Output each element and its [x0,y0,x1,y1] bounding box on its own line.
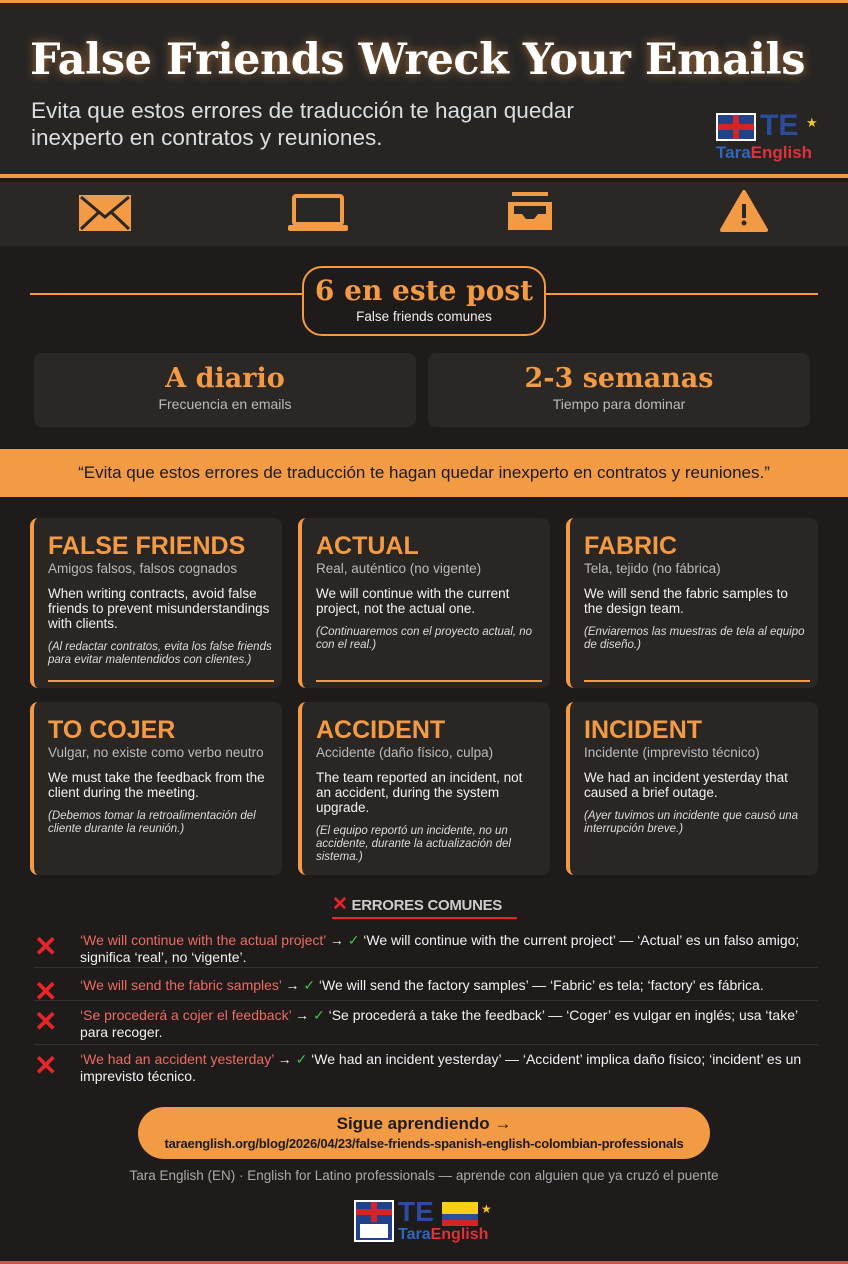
card: ACCIDENT: Accidente (daño físico, culpa) [316,745,493,760]
quote banner: “Evita que estos errores de traducción te hagan quedar inexperto en contratos y reuniones.” [78,463,770,482]
card: ACTUAL: Real, auténtico (no vigente) [316,561,481,576]
card: FALSE FRIENDS: (Al redactar contratos, evita los false friends para evitar malentendidos con clientes.) [48,641,272,666]
CTA button: Sigue aprendiendo → [337,1114,511,1133]
card: TO COJER [30,702,282,875]
card: TO COJER: We must take the feedback from the client during the meeting. [48,770,265,800]
card: FALSE FRIENDS: Amigos falsos, falsos cognados [48,561,237,576]
header [0,0,848,178]
card: ACTUAL [298,518,550,688]
icon: laptop [288,194,348,231]
logo: TaraEnglish header [716,109,818,162]
stat: 6 en este post [30,266,818,336]
card: FABRIC: We will send the fabric samples to the design team. [584,586,788,616]
error 4: ✕ [34,1050,57,1081]
card: INCIDENT: We had an incident yesterday that caused a brief outage. [584,770,788,800]
error 1: ‘We will continue with the actual project’ → ✓ ‘We will continue with the current project’ — ‘Actual’ es un falso amigo; significa ‘real’, no ‘vigente’. [80,932,799,965]
error 2 [34,977,818,1001]
logo: footer: TE [398,1196,434,1227]
card: FABRIC [566,518,818,688]
card: TO COJER: TO COJER [48,716,175,744]
card: ACCIDENT: ACCIDENT [316,716,445,744]
stat: 2-3 semanas [428,353,810,427]
CTA button [138,1107,710,1159]
logo: TaraEnglish header: TaraEnglish [716,143,812,162]
card: ACTUAL: ACTUAL [316,532,419,560]
logo: TaraEnglish header: TE [760,109,798,142]
CTA button: taraenglish.org/blog/2026/04/23/false-friends-spanish-english-colombian-professionals [164,1136,684,1151]
card: ACCIDENT [298,702,550,875]
icon bar [0,182,848,246]
card: FALSE FRIENDS: FALSE FRIENDS [48,532,245,560]
stat: 2-3 semanas: Tiempo para dominar [553,396,685,412]
card: INCIDENT [566,702,818,875]
card: FALSE FRIENDS: When writing contracts, avoid false friends to prevent misunderstandings with clients. [48,586,269,631]
card: FABRIC: (Enviaremos las muestras de tela al equipo de diseño.) [584,626,805,651]
footer text: Tara English (EN) · English for Latino professionals — aprende con alguien que ya cruzó el puente [129,1168,719,1183]
error 1: ✕ [34,931,57,962]
subtitle: inexperto en contratos y reuniones. [31,125,382,150]
title: False Friends Wreck Your Emails [30,35,805,85]
logo: TaraEnglish header: ★ [806,115,818,130]
stat: 6 en este post: 6 en este post [315,274,533,307]
subtitle: Evita que estos errores de traducción te hagan quedar [31,98,574,123]
card: TO COJER: (Debemos tomar la retroalimentación del cliente durante la reunión.) [48,810,256,835]
error 2: ‘We will send the fabric samples’ → ✓ ‘We will send the factory samples’ — ‘Fabric’ es tela; ‘factory’ es fábrica. [80,977,764,993]
logo: footer [354,1196,492,1243]
stat: 6 en este post: False friends comunes [356,309,492,324]
error 3: ✕ [34,1006,57,1037]
card: INCIDENT: (Ayer tuvimos un incidente que causó una interrupción breve.) [584,810,798,835]
quote banner [0,449,848,497]
card: ACTUAL: (Continuaremos con el proyecto actual, no con el real.) [316,626,532,651]
subtitle [31,98,574,150]
card: FALSE FRIENDS [30,518,282,688]
error 4: ‘We had an accident yesterday’ → ✓ ‘We had an incident yesterday’ — ‘Accident’ implica daño físico; ‘incident’ es un imprevisto técnico. [80,1051,801,1084]
logo: footer: TaraEnglish [398,1226,488,1243]
bottom line [0,1261,848,1264]
card: ACTUAL: We will continue with the current project, not the actual one. [316,586,509,616]
stat: A diario [34,353,416,427]
stat: 2-3 semanas: 2-3 semanas [525,363,713,394]
error 3: ‘Se procederá a cojer el feedback’ → ✓ ‘Se procederá a take the feedback’ — ‘Coger’ es vulgar en inglés; usa ‘take’ para recoger. [80,1007,798,1040]
card: ACCIDENT: The team reported an incident, not an accident, during the system upgrade. [316,770,522,815]
logo: footer: ★ [481,1202,492,1216]
icon: warning [720,190,768,232]
stat: A diario: A diario [165,363,285,394]
stat: A diario: Frecuencia en emails [158,396,292,412]
card: INCIDENT: Incidente (imprevisto técnico) [584,745,760,760]
card: ACCIDENT: (El equipo reportó un incidente, no un accidente, durante la actualización del sistema.) [316,825,511,863]
icon: envelope [79,195,131,231]
icon: inbox [508,192,552,230]
card: INCIDENT: INCIDENT [584,716,702,744]
card: TO COJER: Vulgar, no existe como verbo neutro [48,745,264,760]
heading: errores comunes: ✕ ERRORES COMUNES [332,894,502,915]
card: FABRIC: Tela, tejido (no fábrica) [584,561,721,576]
card: FABRIC: FABRIC [584,532,677,560]
error 2: ✕ [34,976,57,1007]
